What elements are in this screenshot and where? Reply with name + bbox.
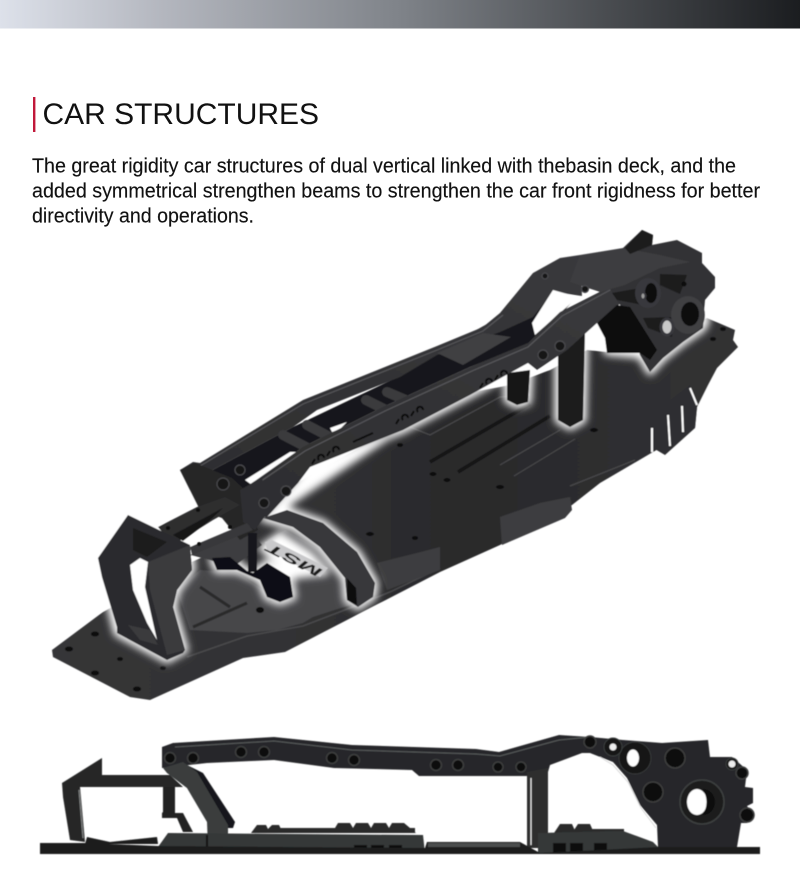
chassis perspective view [52, 230, 738, 700]
description text [32, 154, 760, 228]
grey patch behind shock post [190, 530, 262, 568]
gearbox cylinders [612, 274, 687, 337]
description text: added symmetrical strengthen beams to strengthen the car front rigidness for better [32, 180, 760, 202]
rear gap between rails [532, 290, 578, 335]
description text: The great rigidity car structures of dual vertical linked with thebasin deck, and the [32, 154, 736, 178]
tray ribs [193, 587, 247, 627]
rear battery blocks [538, 831, 658, 853]
dark inner wall between rails [207, 298, 575, 490]
heading accent bar [33, 97, 35, 132]
deck raised edge [187, 568, 440, 657]
tall support post [558, 333, 585, 427]
rear comb tabs [645, 385, 697, 455]
diagonal front brace [163, 762, 228, 848]
rail highlight [175, 737, 590, 756]
centre shock post [248, 533, 257, 572]
rail cut-outs [312, 371, 507, 464]
side battery blocks on deck [377, 547, 440, 590]
curved side brace [263, 510, 375, 607]
hoop inner light stripe [79, 790, 83, 838]
side view bolts [164, 736, 754, 822]
logo plate: MST [262, 539, 324, 581]
base deck plate [52, 318, 738, 700]
front bumper hoop [98, 515, 192, 660]
white stripe along gearbox edge [600, 757, 656, 828]
slits between rails [245, 422, 347, 485]
base plate [40, 842, 760, 854]
servo block [212, 557, 293, 602]
white glow around upper frame [98, 270, 707, 660]
front brace arms [158, 497, 253, 555]
end cap bolts [217, 465, 269, 508]
block ridges [251, 823, 624, 833]
rear support post [527, 768, 548, 848]
near rail end cap [240, 477, 268, 530]
deck holes [65, 327, 726, 692]
gearbox bearing bores [635, 278, 705, 335]
deck panel lines [405, 395, 635, 486]
short support post [507, 370, 530, 405]
title: CAR STRUCTURES [42, 98, 319, 131]
description text: directivity and operations. [32, 204, 254, 228]
rear gearbox upright [570, 230, 715, 372]
white line on post [530, 778, 532, 845]
centre tray under front bulkhead [177, 530, 350, 633]
header gradient bar [0, 0, 800, 28]
gearbox ports [604, 738, 738, 824]
rail bolts [259, 273, 588, 508]
chassis side view [40, 735, 760, 854]
cross struts between rails [283, 392, 408, 448]
logo plate [262, 539, 328, 581]
diagonal black brace [183, 763, 235, 828]
far side rail [180, 255, 582, 490]
deck grooves [430, 404, 550, 472]
rail junction block [180, 463, 258, 540]
rail cover plate [437, 333, 511, 365]
front hoop [62, 758, 183, 842]
block notches [206, 835, 607, 854]
near side rail [242, 280, 640, 518]
forward battery blocks [158, 833, 425, 853]
hoop foot [85, 837, 158, 844]
deck centre riser [428, 843, 520, 847]
far rail highlight [200, 315, 503, 466]
upper frame rail and gearbox [162, 735, 753, 847]
small front strut [162, 787, 193, 832]
